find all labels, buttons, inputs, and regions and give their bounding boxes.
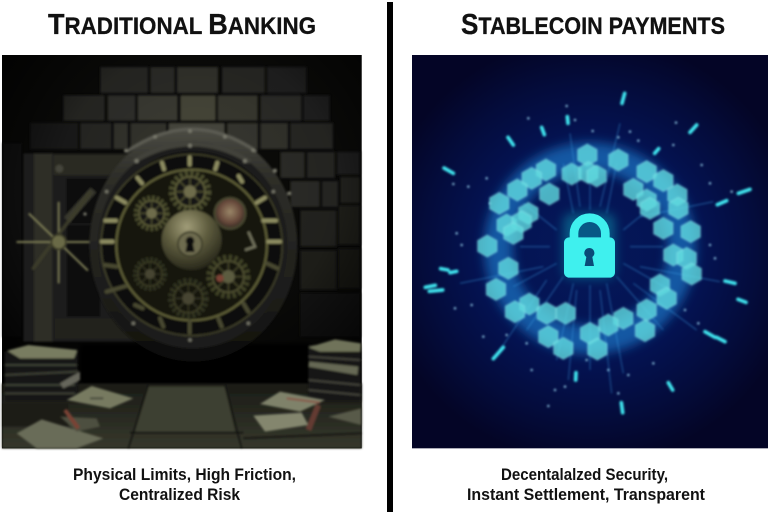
caption: stablecoin payments xyxy=(467,465,705,504)
icon: spoked wheel handle xyxy=(17,193,100,283)
dark gap below door xyxy=(80,343,310,385)
loose papers xyxy=(17,386,361,448)
hexagon ring xyxy=(478,144,701,360)
glow behind hexagon ring xyxy=(498,157,682,340)
caption: stablecoin payments: Instant Settlement, Transparent xyxy=(467,485,705,504)
vault door xyxy=(83,128,297,362)
lock bolts around the ring xyxy=(102,157,280,333)
panel: traditional banking vault image xyxy=(2,55,362,448)
door frame and hinge xyxy=(23,153,137,342)
central dome with keyhole xyxy=(162,210,222,270)
heading: stablecoin payments: STABLECOIN PAYMENTS xyxy=(461,9,725,41)
gears xyxy=(172,173,208,210)
caption: traditional banking: Physical Limits, High Friction, xyxy=(73,465,296,484)
vignette xyxy=(2,55,362,448)
panel: stablecoin payments network image xyxy=(412,55,768,448)
caption: traditional banking xyxy=(73,465,296,504)
rivets xyxy=(83,129,291,342)
stone floor xyxy=(2,383,362,448)
caption: traditional banking: Centralized Risk xyxy=(119,485,240,504)
heading: traditional banking: TRADITIONAL BANKING xyxy=(48,9,316,41)
divider xyxy=(387,2,393,512)
radial light streaks xyxy=(460,123,720,393)
paper stack right xyxy=(308,339,361,402)
caption: stablecoin payments: Decentalalzed Security, xyxy=(501,465,668,484)
particle dots xyxy=(452,105,733,407)
stone brick wall xyxy=(3,67,360,337)
icon: glowing padlock xyxy=(563,213,615,278)
outer cyan dashes xyxy=(425,93,750,413)
paper stack left xyxy=(5,345,80,402)
